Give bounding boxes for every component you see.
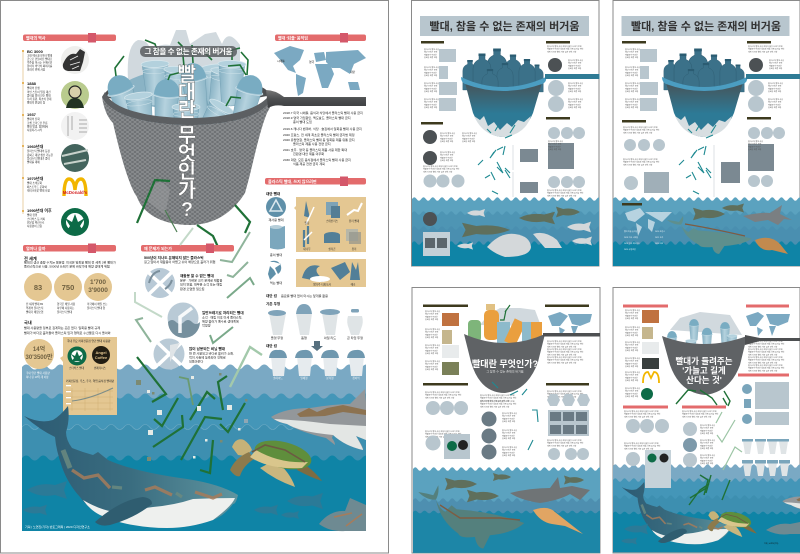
thumb logos	[648, 454, 668, 462]
panel: coffee chart: 엔제리너스	[94, 366, 107, 370]
panel: coffee chart	[60, 337, 117, 415]
cup comparison: 아일 리드	[324, 335, 336, 340]
cup comparison: 콘 타입 뚜껑	[347, 335, 363, 340]
panel: thumbnail B	[613, 0, 800, 294]
panel: alternatives: 밀짚	[305, 221, 310, 225]
text: ban timeline: 2020 프랑스, 전 세계 최초로 플라스틱 빨대 금지법 제정	[283, 132, 355, 137]
timeline: history of straws: 피하기 위해 사용	[27, 68, 46, 72]
stat circles: 억개의 플라스틱	[26, 306, 44, 310]
thumb images	[641, 310, 659, 400]
text: ban timeline: 식품 제공 전면 금지 계획	[293, 161, 325, 166]
thumb fish	[766, 522, 800, 534]
timeline: history of straws: 항아리 바닥의 찌꺼기를	[27, 64, 53, 68]
thumb ocean	[613, 464, 800, 552]
cup comparison: 기존 뚜껑	[266, 301, 280, 306]
thumb headers	[423, 304, 589, 386]
straws in cups	[115, 40, 248, 106]
text and icons: reasons: 한 번 사용되고 바다로 흘러가 소화,	[189, 350, 234, 356]
world map: 시애틀	[277, 59, 285, 63]
thumb text lines: 2018 미국 시애틀	[624, 235, 638, 239]
thumb silhouette	[621, 524, 648, 545]
thumb ocean	[412, 197, 599, 266]
stat: Korea: 14억	[33, 345, 45, 353]
timeline: history of straws: 빨대 소비문화	[27, 181, 43, 185]
timeline: history of straws: 특허 출원, 최초의 현대	[27, 97, 52, 101]
stat: Korea	[24, 339, 54, 379]
stat circles: 플라스틱 빨대	[57, 310, 73, 314]
title vertical: 가	[178, 179, 196, 202]
underwater straws	[137, 357, 245, 473]
thumb headers	[623, 304, 789, 408]
thumb cups	[742, 439, 790, 476]
panel: alternatives: 대나무	[303, 247, 311, 251]
timeline: history of straws: 빨대 유행	[27, 213, 38, 217]
header: 플라스틱 빨대	[265, 176, 366, 186]
timeline: history of straws	[22, 49, 54, 228]
panel: alternatives: 쌀가루·타피오카	[313, 282, 331, 286]
thumb title: 빨대, 참을 수 없는 존재의 버거움	[631, 19, 781, 33]
panel: alternatives: 종이 빨대	[270, 252, 282, 257]
header: 빨대의 역사: 빨대의 역사	[26, 34, 46, 40]
thumb fish	[457, 207, 592, 257]
thumb text	[624, 308, 784, 465]
title vertical: 대	[178, 81, 196, 104]
text: ban timeline: 2018.7 미국 시애틀, 음식과 식당에서 플라스틱 빨대 사용 금지	[283, 110, 363, 115]
thumb basket	[461, 48, 600, 194]
timeline: history of straws: 1888	[27, 81, 37, 86]
thumb text lines: 2020 프랑스	[655, 229, 665, 233]
cup comparison: 플랫 뚜껑	[271, 335, 283, 340]
header: 왜 문제가 되는가: 왜 문제가 되는가	[144, 245, 172, 251]
panel: coffee chart: 스타벅스 빨대	[69, 366, 85, 370]
silhouette fish	[23, 481, 323, 519]
text: Korea usage	[24, 319, 111, 335]
timeline: history of straws: 플라스틱 빨대가 종이	[27, 156, 51, 160]
thumb side content	[622, 41, 785, 206]
text and icons: reasons: 해양 흘러가 폐수로 생태계에	[202, 318, 239, 324]
panel: thumbnail C	[412, 288, 602, 553]
text: Korea usage: 국내	[24, 319, 32, 326]
sea turtle	[230, 435, 322, 487]
text and icons: reasons: 되지 않음, 대부분 소각 또는 매립	[180, 282, 222, 286]
thumb basket: 빨대가 들려주는	[675, 356, 733, 366]
text and icons: reasons: 환경 오염을 일으킴	[180, 286, 205, 291]
text: ban timeline: 종이 빨대 도입	[293, 119, 312, 124]
panel: alternatives: 먹는 빨대	[270, 280, 282, 285]
timeline: history of straws: 플라스틱 빨대의 등장	[27, 149, 51, 153]
text: ban timeline: 친환경 대안 제품 의무화	[293, 151, 324, 156]
timeline: history of straws: 스타벅스 등 커피	[27, 217, 46, 221]
thumb basket	[662, 48, 800, 194]
microplastic pieces	[136, 373, 248, 461]
world map	[274, 46, 366, 96]
cups in basket	[102, 60, 267, 150]
cup comparison: 음료를 빨대 없이 마시는 덮개를 활용	[281, 293, 328, 298]
panel: alternatives: 대안 빨대	[266, 191, 280, 196]
thumb map	[548, 312, 592, 336]
icons: history medallions	[61, 46, 89, 236]
text: ban timeline: 플라스틱 제품 사용 전면 금지	[293, 141, 331, 146]
panel: alternatives: 해조	[351, 282, 356, 286]
panel: alternatives: 실리콘	[328, 247, 336, 251]
thumb teal straws	[492, 382, 538, 450]
thumb sea creatures	[418, 473, 590, 549]
text: ban timeline: 2019.6 캐나다 밴쿠버, 식당 · 술집에서 일회용 빨대 사용 금지	[283, 126, 362, 131]
text: ban timeline: 2021 호주 · 영국 등 플라스틱 제품 사용 제한 확대	[283, 147, 347, 152]
subtitle pill: 그 참을 수 없는 존재의 버거움	[144, 46, 232, 56]
text: ban timeline: 2030 대만, 모든 음식점에서 플라스틱 빨대 사용 금지	[283, 157, 351, 162]
panel: coffee chart: 국내 주요 커피전문점 연간 빨대 사용량	[67, 339, 111, 343]
text and icons: reasons: 소각 · 매립 이후 미세 플라스틱,	[202, 314, 242, 320]
text: ban timeline	[283, 110, 363, 166]
thumb text lines: 2030 대만	[655, 241, 663, 245]
title vertical: 빨	[178, 63, 196, 86]
header: 빨대의 역사	[23, 33, 116, 42]
thumb sea creatures	[667, 204, 792, 254]
panel: coffee chart: Coffee	[95, 355, 108, 360]
title vertical: 인	[178, 160, 196, 183]
stat circles: 빨대가 해양오염	[26, 310, 44, 314]
cup comparison: 대안 컵	[266, 293, 277, 298]
text and icons: reasons	[144, 255, 244, 370]
cup comparison: 대안 컵	[266, 343, 277, 348]
timeline: history of straws: 종이를 말아 만든 빨대	[27, 94, 51, 98]
sipping lid cups: 접이식	[352, 376, 360, 380]
title vertical	[178, 63, 196, 221]
timeline: history of straws: 값싸고 대량 생산 가능한	[27, 153, 54, 157]
thumb stat circles	[426, 394, 590, 460]
sipping lid cups: 분리형	[326, 376, 334, 380]
sipping lid cups: 일체형	[300, 376, 308, 380]
text and icons: reasons: 길고 얇아서 재활용이 어렵고 쉬이 해양으로 흘러가 위협	[144, 259, 216, 264]
thumb image grid and circles	[482, 412, 587, 460]
stat circles: 영국은 매일 사용	[57, 302, 76, 306]
timeline: history of straws: 전문점 확산으로	[27, 220, 45, 224]
text and icons: reasons: 먹이 사슬에 농축되어 인체로	[189, 354, 226, 360]
thumb info box	[423, 232, 450, 256]
thumb text lines: 2020 유럽연합	[624, 247, 636, 251]
cup comparison: 돔형	[301, 335, 307, 340]
timeline: history of straws: 패스트푸드 문화와	[27, 185, 47, 189]
stat: Korea: 30'3500만	[26, 353, 53, 361]
panel: thumbnail A	[412, 0, 601, 294]
timeline: history of straws: 금으로 만들어진 빨대로	[27, 57, 53, 61]
timeline: history of straws: 빨대를 대체	[27, 160, 40, 164]
header: 빨대 퇴출 움직임	[275, 33, 366, 42]
stat circles: 1'700	[90, 279, 106, 286]
text: Korea usage: 빨대가 바다로 흘러들어 플라스틱 입자 형태로 수산물로 다시 돌아와	[24, 330, 111, 335]
icons: history medallions: McDonald's	[63, 190, 88, 195]
panel: alternatives: 유리 빨대	[349, 219, 360, 223]
thumb basket: 그 참을 수 없는 존재의 버거움	[486, 368, 524, 374]
thumb shark	[782, 486, 800, 519]
sipping lid cups: 슬라이드	[273, 376, 283, 380]
thumb title	[420, 16, 589, 36]
timeline: history of straws: 사용량이 급증	[27, 224, 43, 228]
ocean background	[22, 364, 370, 531]
thumb logos	[447, 440, 468, 451]
thumb ocean	[413, 467, 602, 553]
thumb light straws	[716, 412, 742, 470]
thumb credit: 기획 | 노연진(기자)	[764, 541, 779, 545]
world map: 영국	[309, 60, 315, 64]
stat circles: 750	[62, 283, 74, 292]
thumb map	[625, 208, 672, 236]
stat: Korea: 하나 된 10억 개 이상	[26, 375, 49, 379]
text and icons: reasons: 많이 남용되는 비닐 빨대	[189, 346, 225, 351]
world map: 대만	[350, 70, 356, 74]
thumb timeline images	[442, 313, 459, 375]
basket handle	[266, 90, 366, 108]
panel: thumbnail D	[613, 288, 800, 553]
panel: main poster	[0, 0, 388, 553]
thumb text lines	[624, 229, 665, 251]
panel: coffee chart: Angel	[95, 350, 107, 355]
header: 얼마나 쓸까: 얼마나 쓸까	[26, 245, 46, 251]
timeline: history of straws: 사용되기 시작	[27, 128, 43, 132]
stat circles: 미국에서 매일 쓰는	[87, 302, 108, 306]
timeline: history of straws: 1970년대	[27, 175, 44, 181]
thumb basket	[662, 312, 800, 395]
title vertical: 무	[178, 125, 196, 147]
basket back and bottles silhouette	[102, 30, 272, 110]
timeline: history of straws: 빨대의 진화	[27, 117, 40, 121]
text: usage world: 전 세계	[24, 255, 37, 262]
text: usage world	[24, 255, 116, 268]
thumb basket: 빨대란 무엇인가?	[472, 358, 538, 369]
title vertical: ?	[181, 199, 193, 221]
sipping lid cups	[269, 350, 365, 380]
thumb turtle	[707, 509, 757, 537]
text and icons: reasons: 500년이 지나도 분해되지 않는 플라스틱	[144, 255, 204, 260]
text and icons: reasons: 분류 · 가벼운 크기 문제로 재활용	[180, 278, 222, 282]
panel: coffee chart: 커피전문점, 주스, 주거, 약업 음식점 빨대량	[66, 379, 115, 383]
stat circles: 하루에 사용되는	[57, 306, 75, 310]
stat: Korea: 국내 연간 빨대 사용량	[26, 371, 50, 375]
fish bottom right	[319, 498, 366, 531]
timeline: history of straws: 테이크아웃 빨대 사용	[27, 188, 51, 192]
timeline: history of straws: 마빈 스톤이 밀짚 대신	[27, 90, 51, 94]
timeline: history of straws: 빨대 발명, 병원에서	[27, 124, 49, 128]
stat circles: 플라스틱 빨대 양	[87, 306, 106, 310]
header: 왜 문제가 되는가	[141, 244, 234, 253]
header: 플라스틱 빨대: 플라스틱 빨대, 쓰지 않으려면	[268, 178, 317, 184]
text and icons: reasons: 일반쓰레기로 처리되는 빨대	[202, 310, 244, 315]
thumb stat circles	[626, 382, 789, 488]
panel: alternatives: 스테인리스	[326, 219, 339, 223]
timeline: history of straws: BC 3000	[27, 49, 44, 54]
thumb text	[425, 309, 583, 457]
thumb text lines: 2021 호주	[655, 235, 663, 239]
header: 얼마나 쓸까	[23, 244, 116, 253]
title vertical: 엇	[178, 142, 196, 165]
timeline: history of straws: 1960년대	[27, 143, 44, 149]
timeline: history of straws: 1990년대 이후	[27, 207, 52, 213]
light straws	[135, 228, 262, 387]
cup comparison	[266, 293, 363, 351]
credit: 기획 | 노연진(기자) 빈토그래픽 | 2020 디자인연구소	[25, 524, 90, 529]
stat circles: 전 세계 빨대 83	[26, 302, 44, 306]
text: ban timeline: 2020 유럽연합, 플라스틱 빨대 등 일회용 제품 유통 금지	[283, 137, 355, 142]
thumb side content	[421, 41, 585, 226]
text: usage world: 플라스틱으로 사용, 5000년 쓰레기 문제 바닷가에 해양 생태계 위협	[24, 264, 110, 268]
basket body	[102, 92, 272, 225]
timeline: history of straws: 조셉 프리드먼 주름	[27, 121, 48, 125]
stat circles	[24, 273, 112, 314]
panel: alternatives: 재사용 빨대	[268, 217, 284, 222]
timeline: history of straws: 1937	[27, 112, 37, 117]
text and icons: reasons: 되돌아온다	[189, 358, 203, 364]
title vertical: 란	[178, 98, 196, 122]
text: Korea usage: 빨대 사용량을 정부로 집계하는 곳은 없다. 일회용 빨대 규제	[24, 325, 100, 330]
whale	[24, 406, 238, 528]
thumb basket	[464, 304, 600, 393]
shark	[271, 389, 366, 450]
timeline: history of straws: 고대 메소포타미아 빨대	[27, 54, 53, 58]
thumb title	[622, 16, 790, 36]
panel: alternatives	[266, 191, 366, 287]
thumb whale	[622, 482, 731, 544]
timeline: history of straws: 빨대의 원형이 됨	[27, 100, 46, 104]
thumb basket: '가늘고 길게	[682, 366, 726, 376]
straws out of basket	[137, 180, 250, 247]
thumb basket: 산다는 것'	[686, 375, 722, 385]
header: 빨대 퇴출 움직임: 빨대 '퇴출' 움직임	[278, 34, 308, 40]
timeline: history of straws: 맥주를 마시는 수메르인	[27, 60, 53, 64]
thumb text lines: 빨대 퇴출 움직임	[624, 229, 637, 233]
thumb text lines: 2018 영국 맥도날드	[624, 241, 640, 245]
panel: alternatives: 유리	[352, 247, 357, 251]
text and icons: reasons: 재활용 할 수 없는 빨대	[180, 273, 214, 278]
thumb alt icons	[742, 384, 752, 424]
text and icons: reasons: 악영향	[202, 322, 211, 328]
thumb straws	[676, 390, 730, 505]
timeline: history of straws: 빨대의 탄생	[27, 86, 40, 90]
text: usage world: 빨대의 생산 총량 수치는 불분명. 미국은 일회용 빨대 전 세계 3위 빨대가	[24, 260, 116, 264]
text: ban timeline: 2018.9 영국 가입원인, 맥도날드, 플라스틱 빨대 금지	[283, 115, 351, 120]
stat circles: 83	[34, 283, 42, 292]
thumb ocean	[613, 197, 800, 266]
thumb title: 빨대, 참을 수 없는 존재의 버거움	[430, 19, 579, 33]
thumb map	[746, 312, 790, 336]
stat circles: 3'9000	[88, 287, 108, 294]
